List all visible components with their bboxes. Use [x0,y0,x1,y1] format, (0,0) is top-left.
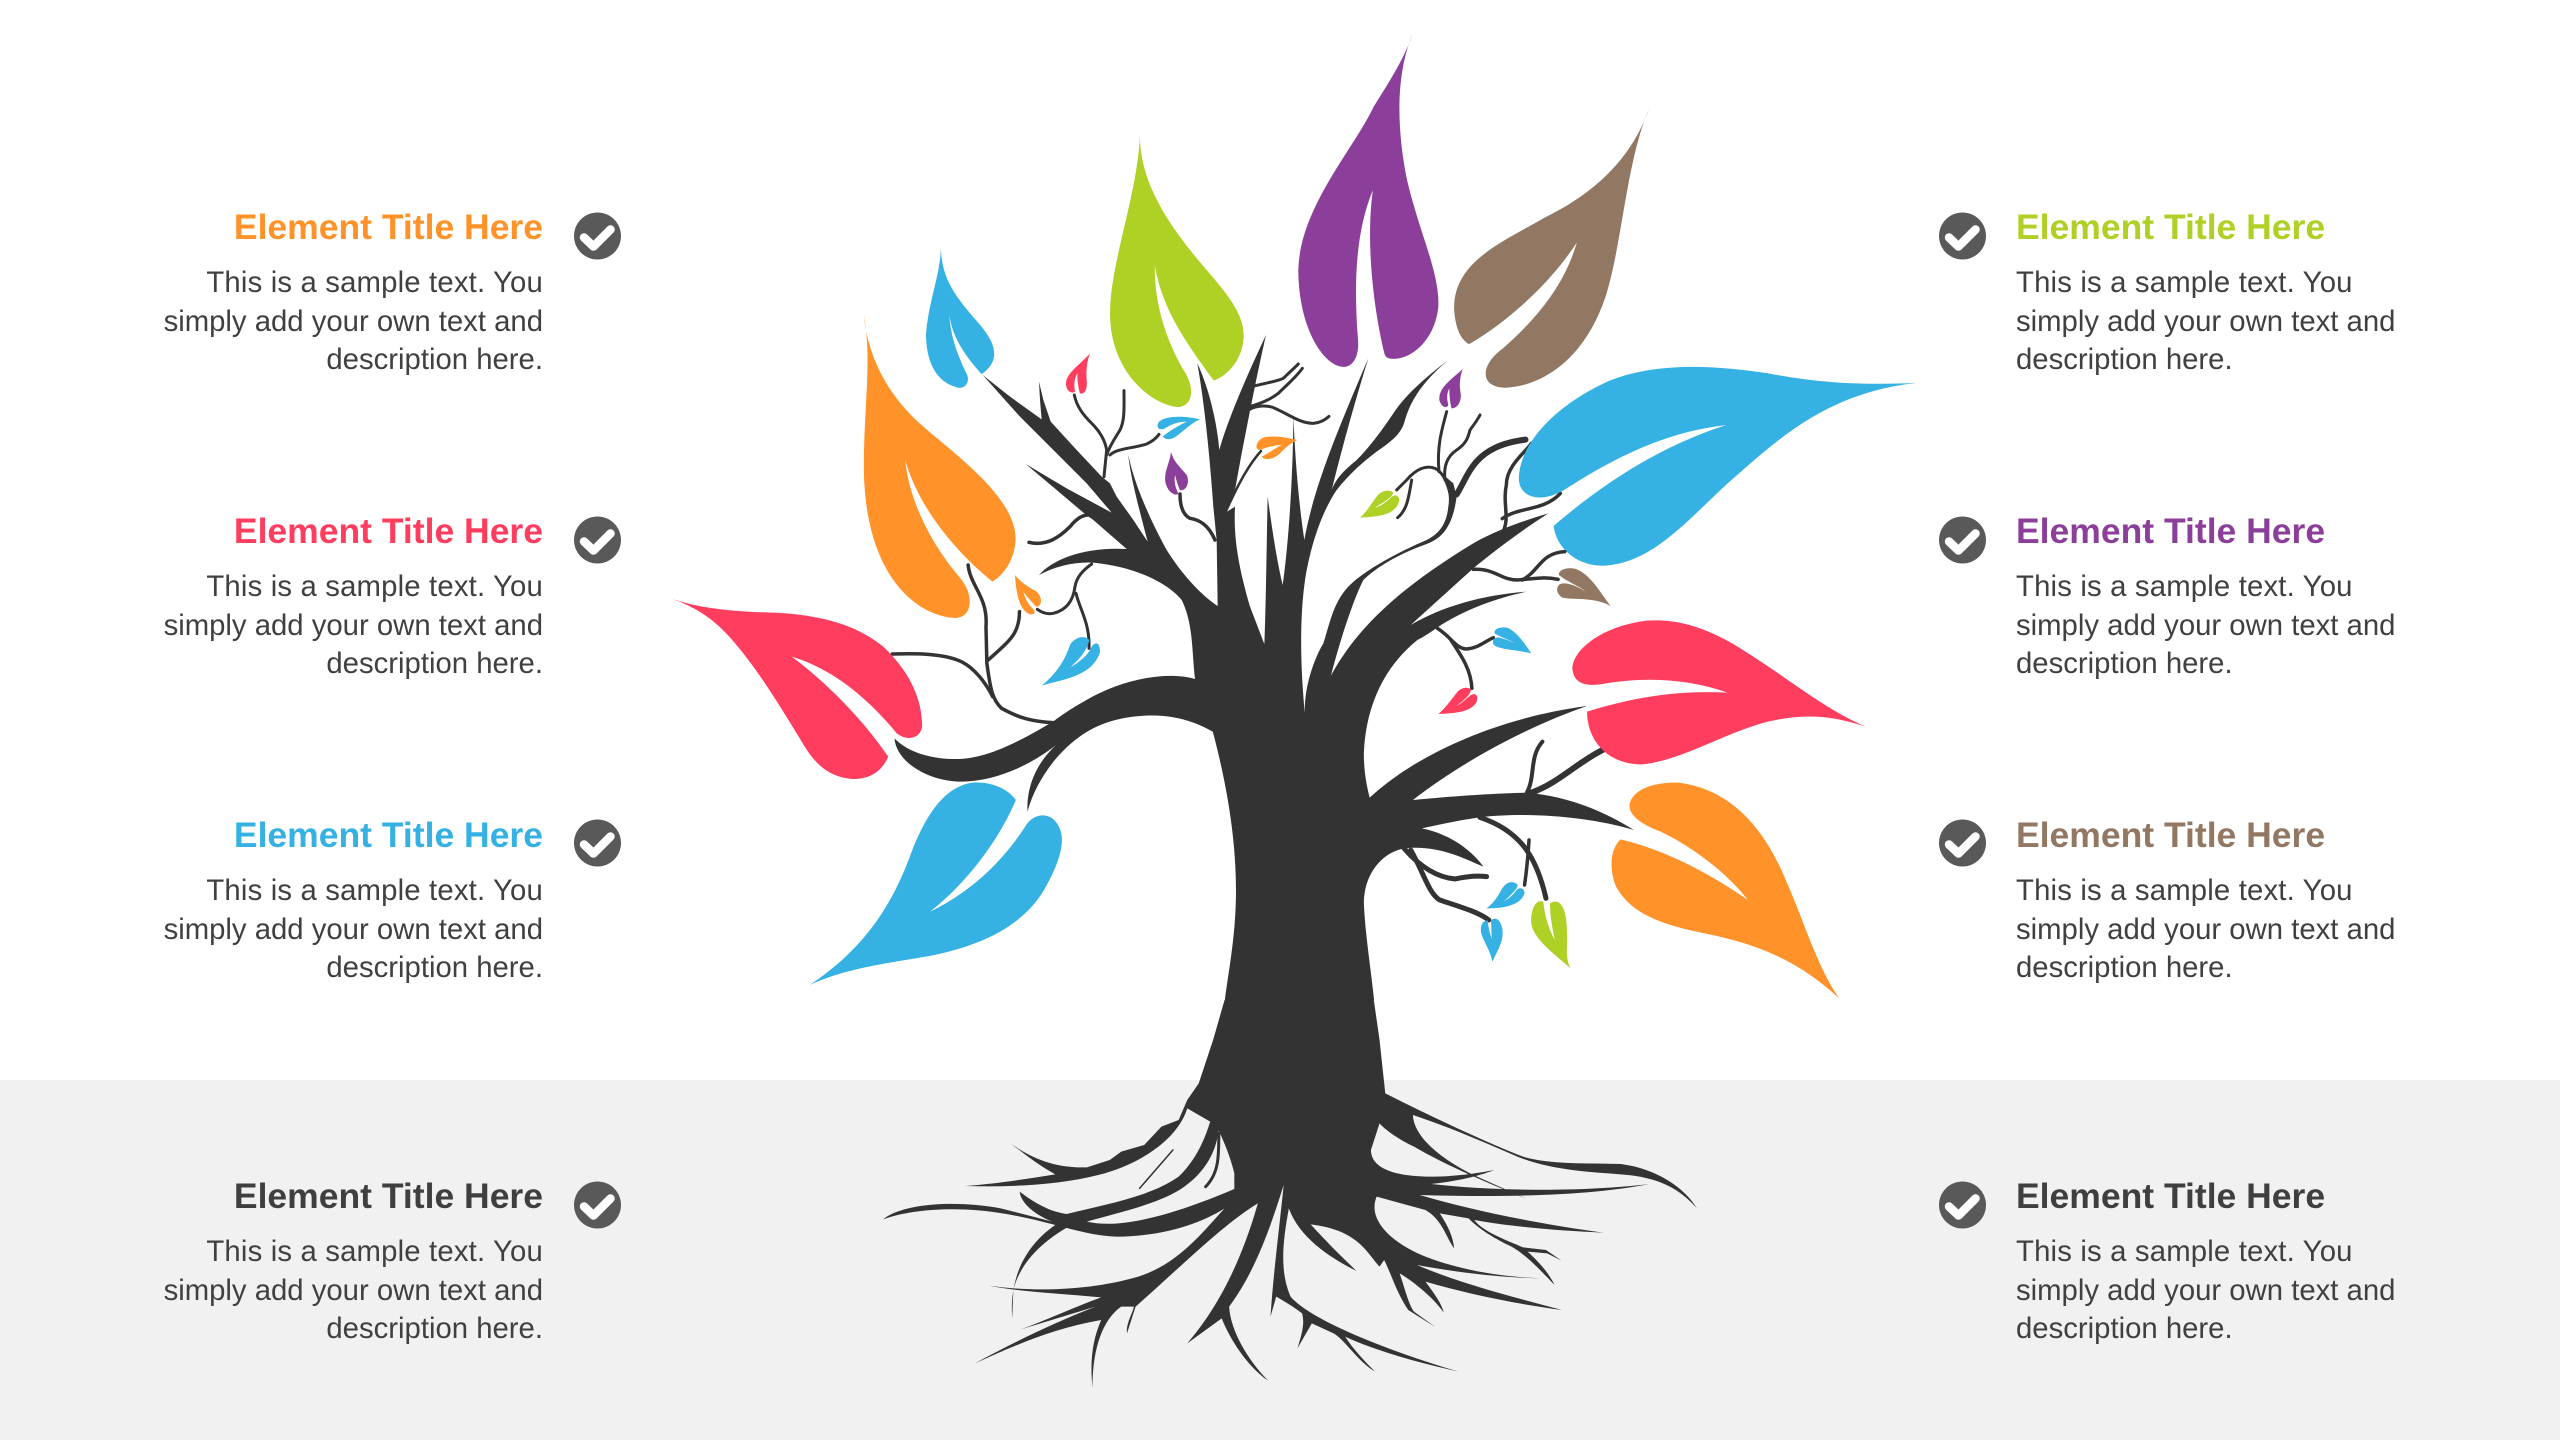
leaf: big red right [1572,620,1866,764]
leaf: big green [1110,136,1244,407]
small leaf: orange left [1015,575,1041,614]
icon: check left 2 [574,516,621,564]
small leaf: red [1066,353,1090,394]
root mass [883,1000,1697,1388]
leaf: blue top left [926,247,994,388]
text block: left 3 [164,814,543,984]
right limbs and trunk right edge [1250,513,1634,1000]
inner right limb [1305,473,1457,715]
big upper leaves [864,34,1917,618]
small leaf: red right [1438,688,1477,714]
text block: left 1: simply add your own text and [164,305,543,338]
leaf: big blue lower left [810,783,1062,985]
text block: left 1 [164,206,543,376]
gap between upper roots [1087,1131,1234,1224]
ground band [0,1080,2560,1440]
text block: left 2: Element Title Here [234,510,543,550]
icon: check left 4 [574,1182,621,1228]
text block: right 2 [2016,510,2395,680]
text block: left 4: simply add your own text and [164,1274,543,1307]
text block: left 1: Element Title Here [234,206,543,246]
icon: check right 1 [1939,212,1986,260]
trunk base and roots [883,1000,1697,1388]
text block: left 2: simply add your own text and [164,609,543,642]
leaf: big orange left [864,315,1016,618]
right upper twigs [1457,440,1560,533]
crown twigs [1029,364,1480,648]
small leaf: purple right [1439,369,1463,408]
text block: right 1: description here. [2016,343,2233,376]
text block: right 2: Element Title Here [2016,510,2325,550]
text block: left 2 [164,510,543,680]
text block: left 3: Element Title Here [234,814,543,854]
small leaf: blue hanging [1481,919,1503,962]
text block: left 4 [164,1176,543,1345]
text block: left 3: simply add your own text and [164,913,543,946]
text block: right 3: This is a sample text. You [2016,874,2353,907]
text block: right 1: simply add your own text and [2016,305,2395,338]
thin root tendrils [1140,1133,1219,1188]
leaf: big red left [671,598,922,779]
small leaf: blue left [1042,637,1100,686]
small leaf: green hanging [1531,901,1571,968]
text block: right 2: description here. [2016,647,2233,680]
text block: right 4: This is a sample text. You [2016,1235,2353,1268]
text block: right 1 [2016,206,2395,376]
small leaf: orange [1256,437,1297,459]
text block: left 4: This is a sample text. You [206,1235,543,1268]
left limb and trunk left edge [894,676,1287,1000]
text block: right 3: description here. [2016,951,2233,984]
text block: right 1: This is a sample text. You [2016,266,2353,299]
icon: check left 1 [574,212,621,260]
text block: left 1: This is a sample text. You [206,266,543,299]
text block: right 4: Element Title Here [2016,1176,2325,1216]
left limb and left leaves [671,565,1287,1000]
text block: right 1: Element Title Here [2016,206,2325,246]
text block: left 3: description here. [326,951,543,984]
text block: right 2: This is a sample text. You [2016,570,2353,603]
text block: left 3: This is a sample text. You [206,874,543,907]
icon: check left 3 [574,820,621,866]
text block: right 3: simply add your own text and [2016,913,2395,946]
leaf: big purple [1298,34,1438,367]
text block: right 4: description here. [2016,1312,2233,1345]
crown branches [983,335,1448,730]
long downward root [1012,1218,1081,1318]
small leaf: blue [1158,417,1200,439]
small leaf: green [1360,491,1399,518]
text block: right 3 [2016,814,2395,984]
text block: right 4: simply add your own text and [2016,1274,2395,1307]
right twigs [1404,552,1603,920]
leaf: big blue right [1519,367,1917,566]
leaf: big orange right [1612,783,1839,998]
icon: check right 2 [1939,516,1986,564]
text block: right 3: Element Title Here [2016,814,2325,854]
right limbs and right leaves [1250,513,1866,1000]
small leaf: brown [1557,568,1611,606]
text block: left 4: Element Title Here [234,1176,543,1216]
small leaf: blue lower right [1487,882,1525,908]
small leaf: blue upper right [1493,627,1531,653]
text block: left 4: description here. [326,1312,543,1345]
icon: check right 3 [1939,820,1986,866]
leaf: big brown [1454,109,1649,388]
icon: check right 4 [1939,1182,1986,1228]
text block: left 2: This is a sample text. You [206,570,543,603]
text block: left 1: description here. [326,343,543,376]
crown branches, twigs and small leaves [983,335,1480,730]
text block: left 2: description here. [326,647,543,680]
small leaf: purple [1165,452,1188,495]
text block: right 2: simply add your own text and [2016,609,2395,642]
text block: right 4 [2016,1176,2395,1345]
left limb twigs [892,565,1053,723]
